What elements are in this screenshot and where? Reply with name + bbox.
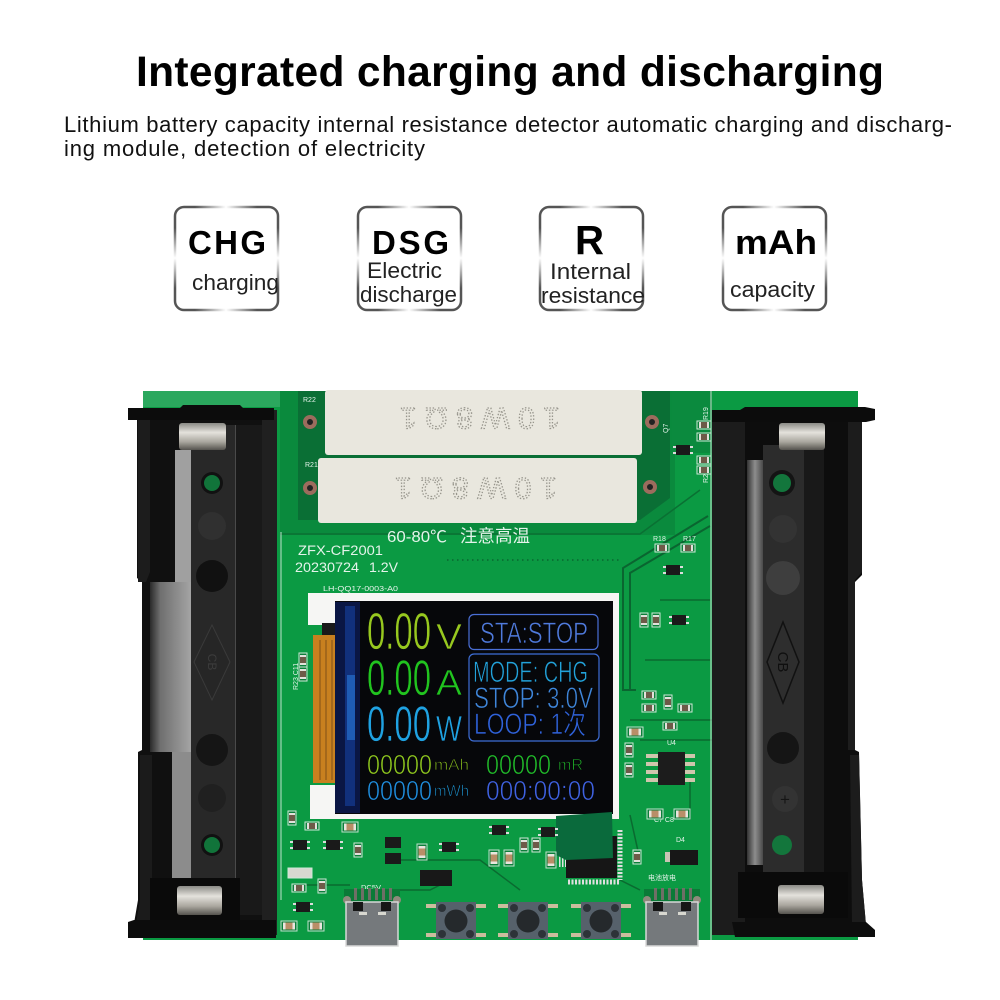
settings box: STOP: 3.0V — [474, 682, 593, 715]
reading: volts: 0.00 — [367, 603, 431, 661]
chip U4 — [646, 752, 695, 785]
push button 3 — [571, 902, 631, 939]
energy counters: 00000 — [367, 749, 432, 780]
silkscreen labels: 20230724 — [295, 560, 360, 575]
silkscreen labels: R19 — [703, 407, 710, 420]
right battery holder: CB — [774, 652, 791, 672]
energy counters — [367, 749, 595, 806]
reading: amps: 0.00 — [367, 650, 431, 706]
icon: DSG electric discharge — [355, 204, 464, 313]
silkscreen labels: DC5V — [361, 883, 381, 892]
reading: watts: 0.00 — [367, 696, 431, 752]
energy counters: mWh — [434, 783, 469, 800]
silkscreen labels: R17 — [683, 536, 696, 543]
icon: R internal resistance: resistance — [541, 283, 645, 308]
silkscreen labels: ZFX-CF2001 — [298, 543, 383, 558]
top contact — [179, 423, 226, 450]
resistor pads — [305, 417, 657, 493]
settings box: LOOP: 1次 — [474, 708, 586, 741]
microcontroller and sticker — [556, 812, 620, 882]
energy counters: 000:00:00 — [486, 775, 595, 806]
description text: Lithium battery capacity internal resistance detector automatic charging and discharg- — [64, 112, 952, 137]
icon: R internal resistance: R — [575, 217, 604, 263]
silkscreen labels: 1.2V — [369, 560, 398, 575]
icon: CHG charging: CHG — [188, 224, 266, 261]
bottom contact — [177, 886, 222, 915]
pcb base — [143, 391, 858, 940]
push button 1 — [426, 902, 486, 939]
energy counters: mAh — [434, 757, 469, 774]
silkscreen labels: R22 — [303, 397, 316, 404]
settings box — [469, 654, 599, 741]
silkscreen labels: R21 — [305, 462, 318, 469]
push button 2 — [498, 902, 558, 939]
icon: DSG electric discharge: discharge — [360, 282, 457, 307]
title: Integrated charging and discharging — [136, 49, 884, 96]
silkscreen labels: D4 — [676, 837, 685, 844]
description text: ing module, detection of electricity — [64, 136, 425, 161]
icon: R internal resistance — [537, 204, 646, 313]
right battery holder — [712, 407, 875, 937]
power resistor bottom: 10W8Ω1 — [395, 471, 557, 504]
energy counters: 00000 — [367, 775, 432, 806]
bottom contact — [778, 885, 824, 914]
power resistor bottom — [318, 458, 637, 523]
icon: mAh capacity — [720, 204, 829, 313]
icon: R internal resistance: Internal — [550, 259, 631, 284]
settings box: MODE: CHG — [473, 656, 588, 689]
silkscreen labels: 注意高温 — [460, 526, 530, 546]
top contact — [779, 423, 825, 450]
usb-c port right — [643, 888, 701, 946]
silkscreen labels: R20 — [703, 470, 710, 483]
usb-c port left — [343, 888, 401, 946]
icon: CHG charging: charging — [192, 270, 279, 295]
silkscreen labels — [293, 397, 710, 892]
silkscreen labels: C7 C8 — [654, 817, 674, 824]
diode D4 — [665, 850, 698, 865]
reading: watts: W — [436, 708, 462, 749]
display bracket — [308, 593, 619, 819]
lcd screen — [335, 601, 613, 814]
icon: DSG electric discharge: DSG — [372, 224, 449, 261]
icon: DSG electric discharge: Electric — [367, 258, 442, 283]
icon: CHG charging — [172, 204, 281, 313]
silkscreen labels: Q7 — [663, 424, 670, 433]
power resistor top: 10W8Ω1 — [400, 401, 560, 434]
feature icons — [172, 204, 829, 313]
icon: mAh capacity: mAh — [735, 224, 817, 262]
power resistor top — [325, 390, 642, 455]
components right side — [625, 421, 711, 865]
icon: mAh capacity: capacity — [730, 277, 815, 302]
silkscreen labels: U4 — [667, 740, 676, 747]
silkscreen labels: 60-80℃ — [387, 529, 447, 546]
left battery holder: CB — [205, 654, 219, 670]
left battery holder — [128, 405, 277, 938]
flex cable — [313, 623, 342, 783]
status box: STA:STOP — [480, 617, 588, 650]
silkscreen labels: R18 — [653, 536, 666, 543]
reading: volts: V — [436, 616, 462, 657]
energy counters: 00000 — [486, 749, 551, 780]
silkscreen labels: 电池放电 — [648, 873, 676, 882]
silkscreen labels: LH-QQ17-0003-A0 — [323, 584, 398, 593]
circuit board — [143, 390, 858, 946]
reading: amps: A — [436, 662, 462, 703]
energy counters: mR — [558, 757, 583, 774]
right battery holder: + — [780, 790, 790, 809]
description text — [64, 112, 952, 161]
components lower left — [281, 811, 641, 931]
silkscreen labels: R23 C11 — [293, 663, 300, 690]
